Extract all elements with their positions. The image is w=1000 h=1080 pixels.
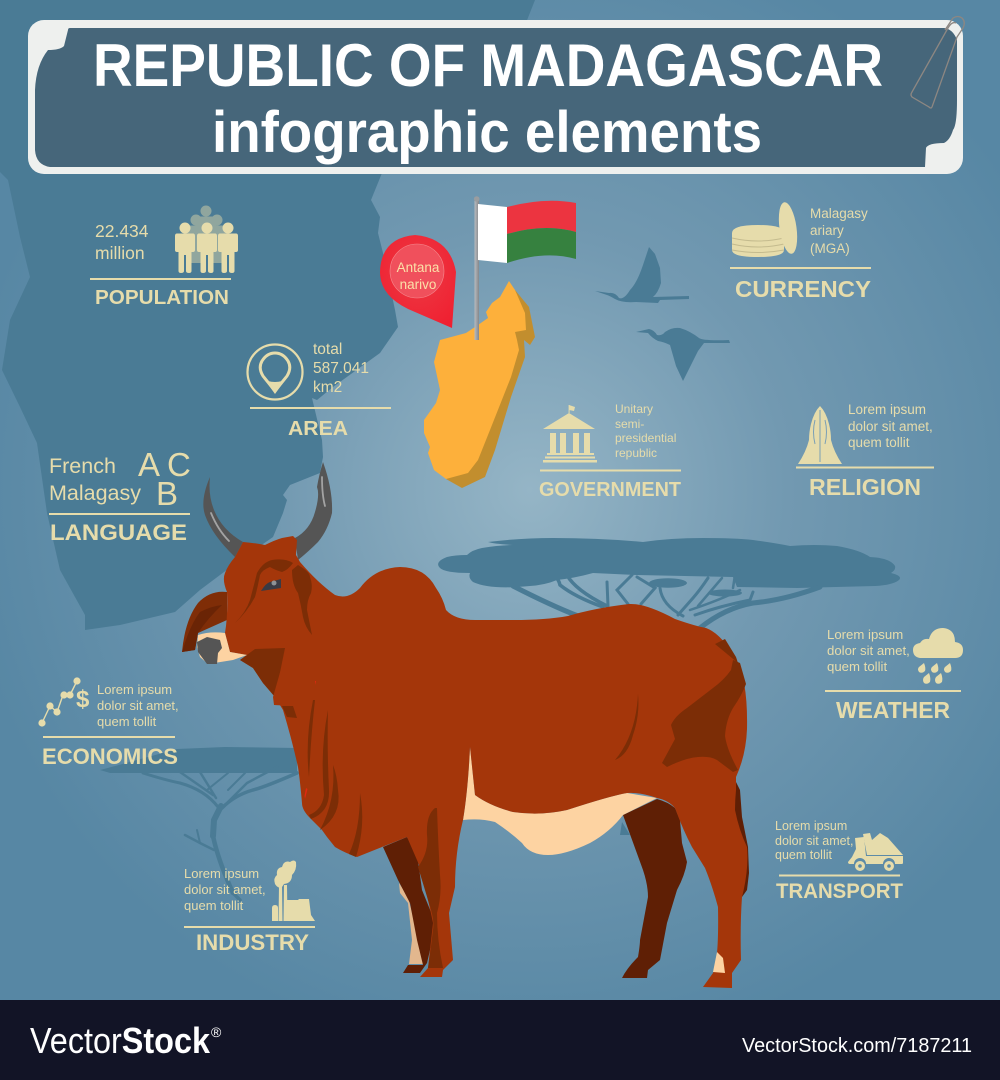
currency text: ariary — [810, 223, 844, 238]
far hind leg — [622, 799, 687, 978]
icon: praying hands — [798, 406, 842, 464]
area value: 587.041 — [313, 360, 369, 377]
weather text: dolor sit amet, — [827, 643, 910, 658]
pin shape — [380, 235, 456, 328]
right horn — [295, 462, 332, 560]
government heading: GOVERNMENT — [539, 479, 681, 501]
flag — [474, 196, 576, 340]
weather text: quem tollit — [827, 659, 887, 674]
weather text: Lorem ipsum — [827, 627, 903, 642]
religion text: Lorem ipsum — [848, 402, 926, 417]
footer id: VectorStock.com/7187211 — [742, 1035, 972, 1057]
economics text: dolor sit amet, — [97, 698, 179, 713]
title line 2: infographic elements — [212, 100, 762, 165]
muzzle — [197, 632, 247, 664]
skin folds — [235, 559, 638, 968]
industry text: Lorem ipsum — [184, 866, 259, 881]
tree silhouette left — [100, 747, 297, 900]
banner panel — [35, 28, 957, 167]
icon: coins — [732, 201, 800, 257]
dewlap flap — [273, 648, 295, 706]
VectorStock logo: VectorStock — [30, 1020, 211, 1061]
area heading: AREA — [288, 418, 348, 440]
map of Africa — [0, 0, 535, 630]
throat shade — [240, 648, 285, 697]
language block — [49, 446, 191, 545]
government text: semi- — [615, 417, 644, 431]
ear — [182, 592, 227, 652]
tail — [735, 780, 749, 897]
cow — [182, 462, 749, 988]
area block — [248, 341, 391, 440]
religion text: quem tollit — [848, 435, 910, 450]
red streaks — [304, 681, 316, 799]
icon: dump truck — [848, 833, 903, 871]
icon: factory — [272, 860, 315, 921]
transport block — [775, 819, 903, 903]
body — [224, 536, 747, 988]
transport text: Lorem ipsum — [775, 819, 847, 833]
transport heading: TRANSPORT — [776, 880, 903, 903]
bird upper — [595, 247, 689, 303]
hock cream — [713, 952, 725, 973]
currency text: Malagasy — [810, 206, 868, 221]
icon: location ring — [248, 344, 302, 400]
area value: km2 — [313, 379, 342, 396]
government block — [539, 402, 681, 501]
banner sheet — [28, 20, 963, 174]
map of Madagascar — [424, 281, 535, 488]
religion heading: RELIGION — [809, 474, 921, 500]
economics block — [38, 677, 179, 769]
icon: chart and dollar — [38, 677, 90, 727]
population value: million — [95, 243, 145, 263]
icon: government building — [543, 405, 597, 462]
white band — [478, 204, 507, 263]
icon: rain cloud — [913, 628, 963, 684]
dewlap lower fold — [282, 706, 297, 718]
belly — [463, 747, 657, 855]
tree trunk glimpse — [620, 822, 630, 835]
weather block — [825, 627, 963, 723]
weather heading: WEATHER — [836, 697, 950, 723]
government text: Unitary — [615, 402, 653, 416]
industry heading: INDUSTRY — [196, 930, 309, 955]
icon: letters: A — [138, 446, 160, 483]
economics heading: ECONOMICS — [42, 744, 178, 769]
icon: letters: C — [167, 446, 191, 483]
language heading: LANGUAGE — [50, 520, 187, 545]
nose — [197, 637, 222, 664]
area value: total — [313, 341, 342, 358]
religion block — [796, 402, 934, 500]
icon: chart and dollar: $ — [76, 686, 90, 713]
industry text: dolor sit amet, — [184, 882, 266, 897]
government text: presidential — [615, 431, 676, 445]
economics text: Lorem ipsum — [97, 682, 172, 697]
tree silhouette right — [438, 538, 900, 628]
pin label: Antana — [397, 260, 440, 275]
flag pole — [474, 199, 479, 340]
icon: letters: B — [156, 475, 178, 512]
language names: French — [49, 454, 116, 478]
eye — [261, 579, 281, 591]
industry text: quem tollit — [184, 898, 244, 913]
red band — [507, 201, 576, 234]
footer bar — [0, 1000, 1000, 1080]
far front leg — [383, 837, 433, 973]
green band — [507, 228, 576, 263]
island extrusion — [446, 290, 535, 488]
currency block — [730, 201, 871, 302]
registered mark: ® — [211, 1024, 222, 1040]
economics text: quem tollit — [97, 714, 157, 729]
capital pin — [380, 235, 456, 328]
population block — [90, 206, 238, 309]
bird lower — [636, 328, 730, 381]
population heading: POPULATION — [95, 287, 229, 309]
government text: republic — [615, 446, 657, 460]
title banner — [28, 16, 964, 174]
pin label: narivo — [400, 277, 436, 292]
population value: 22.434 — [95, 221, 149, 241]
far front leg cream — [399, 883, 424, 964]
currency text: (MGA) — [810, 241, 850, 256]
island — [424, 281, 526, 479]
religion text: dolor sit amet, — [848, 419, 933, 434]
title line 1: REPUBLIC OF MADAGASCAR — [93, 32, 883, 99]
industry block — [184, 860, 315, 955]
paperclip — [911, 16, 964, 108]
birds — [595, 247, 730, 381]
transport text: dolor sit amet, — [775, 834, 854, 848]
language names: Malagasy — [49, 481, 141, 505]
dark patch — [662, 660, 746, 772]
transport text: quem tollit — [775, 848, 832, 862]
left horn — [203, 477, 243, 557]
currency heading: CURRENCY — [735, 276, 871, 302]
population figures — [175, 206, 238, 273]
